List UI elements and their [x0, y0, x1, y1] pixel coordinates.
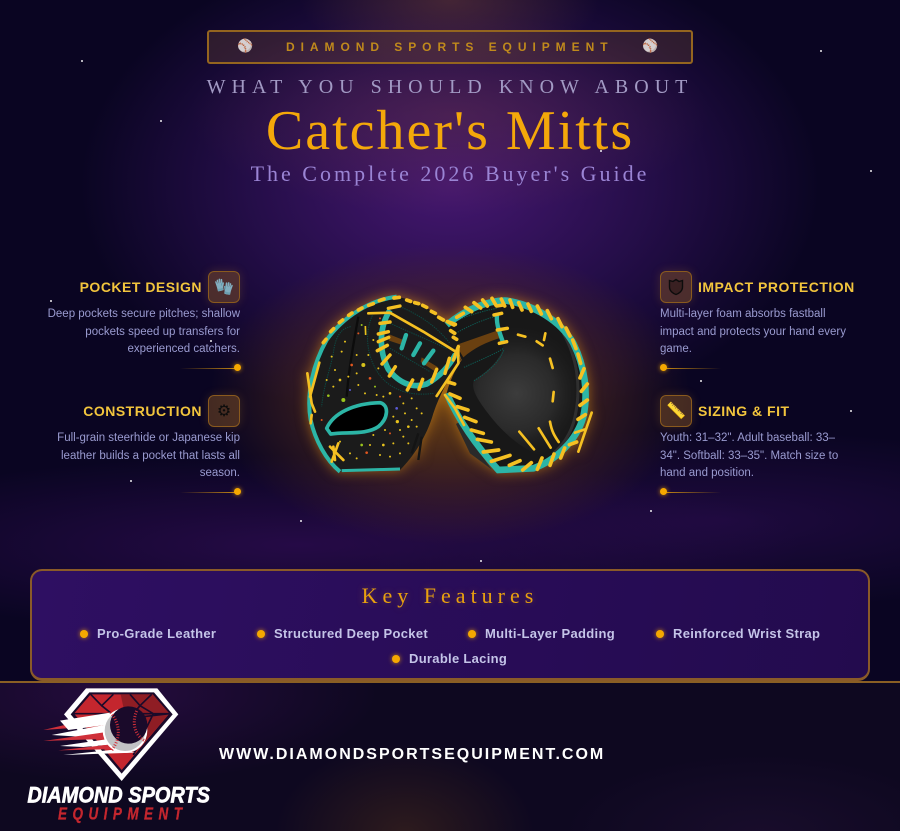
connector: construction — [182, 485, 244, 498]
panel: construction — [57, 392, 244, 498]
panel: key features — [30, 569, 870, 681]
brand banner — [207, 30, 693, 64]
subtitle: The Complete 2026 Buyer's Guide — [251, 161, 649, 186]
heading: pocket design: POCKET DESIGN — [80, 279, 202, 295]
icon: ruler — [660, 395, 692, 427]
description: impact protection: Multi-layer foam absorbs fastball impact and protects your hand every game. — [660, 308, 846, 355]
heading: impact protection: IMPACT PROTECTION — [698, 279, 855, 295]
feature: reinforced wrist strap: Reinforced Wrist Strap — [673, 626, 820, 641]
edge trim and lacing — [447, 301, 586, 470]
icon: gloves: 🧤 — [214, 277, 234, 296]
baseball — [103, 706, 147, 753]
feature: pro-grade leather: Pro-Grade Leather — [97, 626, 216, 641]
brand name: DIAMOND SPORTS EQUIPMENT — [286, 40, 613, 54]
description: sizing and fit: Youth: 31–32". Adult baseball: 33–34". Softball: 33–35". Match size to hand and position. — [660, 432, 838, 479]
interior stitches — [445, 333, 592, 452]
logo: diamond sports equipment — [27, 688, 210, 824]
icon: baseball left: ⚾ — [237, 39, 253, 54]
web pocket — [381, 313, 456, 386]
panel: pocket design — [48, 268, 244, 374]
description: construction: Full-grain steerhide or Japanese kip leather builds a pocket that lasts all season. — [57, 432, 240, 479]
icon: shield — [660, 271, 692, 303]
connector: impact protection — [657, 361, 718, 374]
heading: key features: Key Features — [362, 583, 538, 608]
paint speckles — [321, 317, 423, 459]
icon: gear — [208, 395, 240, 427]
speed streaks — [43, 712, 135, 755]
diamond emblem — [64, 688, 178, 781]
logo tagline: EQUIPMENT — [58, 805, 183, 824]
right mitt (palm view) — [445, 298, 592, 470]
feature: multi-layer padding: Multi-Layer Padding — [485, 626, 615, 641]
feature: durable lacing: Durable Lacing — [409, 651, 507, 666]
hand opening — [327, 403, 386, 434]
panel: sizing and fit — [656, 392, 838, 498]
eyebrow heading: WHAT YOU SHOULD KNOW ABOUT — [207, 76, 693, 98]
footer — [0, 681, 900, 831]
illustration: catcher's mitts — [300, 288, 598, 480]
description: pocket design: Deep pockets secure pitches; shallow pockets speed up transfers for experienced catchers. — [48, 308, 240, 355]
icon: gear: ⚙ — [217, 401, 231, 420]
icon: baseball right: ⚾ — [642, 39, 658, 54]
logo wordmark: DIAMOND SPORTS — [27, 782, 210, 807]
icon: ruler: 📏 — [666, 401, 686, 420]
website url: WWW.DIAMONDSPORTSEQUIPMENT.COM — [219, 746, 605, 763]
heading: sizing and fit: SIZING & FIT — [698, 403, 790, 419]
connector: pocket design — [182, 361, 244, 374]
title: Catcher's Mitts — [266, 100, 634, 162]
feature: structured deep pocket: Structured Deep Pocket — [274, 626, 428, 641]
left mitt (back view) — [307, 297, 461, 472]
edge trim and lacing — [309, 297, 397, 472]
icon: gloves — [208, 271, 240, 303]
panel: impact protection — [656, 268, 855, 374]
heading: construction: CONSTRUCTION — [83, 403, 202, 419]
connector: sizing and fit — [657, 485, 718, 498]
